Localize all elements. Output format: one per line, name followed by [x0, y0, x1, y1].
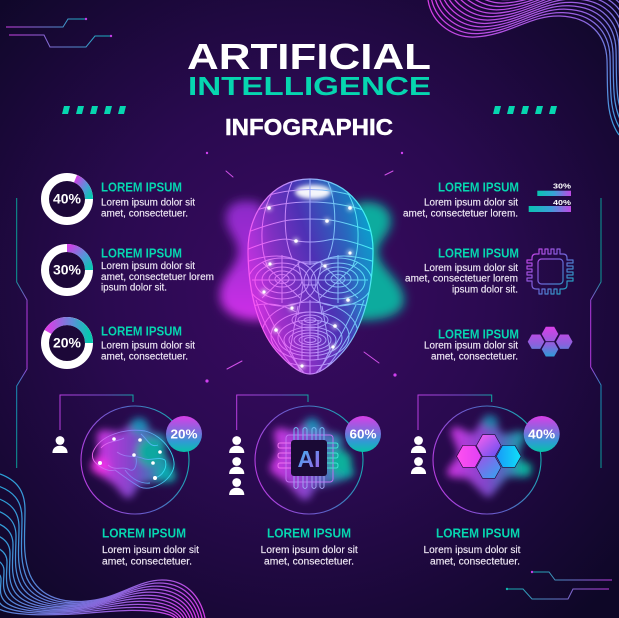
text block: right item 3 — [424, 327, 519, 362]
donut 30% — [45, 248, 89, 292]
text block: right item 2: LOREM IPSUM — [438, 247, 519, 261]
text block: item 3: Lorem ipsum dolor sit — [101, 341, 195, 352]
text block: item 1: Lorem ipsum dolor sit — [101, 198, 195, 209]
text block: bottom left: LOREM IPSUM — [102, 526, 186, 541]
teal dashes right — [493, 106, 557, 114]
badge 60%: 60% — [350, 426, 377, 442]
donut 40% — [45, 177, 89, 221]
badge 40%: 40% — [528, 426, 556, 442]
chip pins — [278, 428, 338, 488]
bracket and person — [52, 395, 133, 453]
text block: right item 1: LOREM IPSUM — [438, 181, 519, 195]
title: INTELLIGENCE — [188, 73, 431, 101]
wave lines bottom left — [0, 474, 205, 618]
title: INFOGRAPHIC — [225, 114, 393, 140]
face glow blobs — [220, 201, 404, 320]
text block: right item 2: Lorem ipsum dolor sit — [424, 263, 518, 274]
text block: bottom left: amet, consectetuer. — [102, 556, 192, 567]
AI label: AI — [298, 446, 320, 472]
title — [187, 36, 431, 140]
wave lines top right — [428, 0, 619, 135]
bracket and persons — [229, 395, 308, 495]
donut 20% — [45, 321, 89, 365]
text block: bottom right: Lorem ipsum dolor sit — [424, 545, 521, 556]
text block: bottom left: Lorem ipsum dolor sit — [102, 545, 199, 556]
text block: item 2: amet, consectetuer lorem — [101, 272, 214, 283]
text block: bottom center — [261, 526, 358, 567]
side line right — [591, 198, 601, 468]
teal dashes left — [62, 106, 126, 114]
title: ARTIFICIAL — [187, 36, 431, 77]
icon: hexagons — [528, 327, 573, 356]
text block: right item 2: ipsum dolor sit. — [452, 285, 518, 296]
blobs — [452, 415, 532, 492]
donut 20%: 20% — [53, 336, 81, 350]
text block: item 1: amet, consectetuer. — [101, 208, 188, 219]
brain outline — [92, 430, 174, 488]
text block: right item 3: LOREM IPSUM — [438, 327, 519, 341]
text block: right item 1: Lorem ipsum dolor sit — [424, 198, 518, 209]
circuit lines top left — [6, 18, 112, 47]
text block: item 3: amet, consectetuer. — [101, 351, 188, 362]
progress bars — [529, 182, 571, 212]
text block: bottom center: amet, consectetuer. — [264, 556, 354, 567]
text block: item 3 — [101, 325, 195, 362]
text block: right item 2: amet, consectetuer lorem — [405, 274, 518, 285]
side line left — [17, 198, 27, 468]
donut 40%: 40% — [53, 192, 81, 206]
glowing hexagons — [457, 435, 521, 478]
icon: chip — [527, 249, 573, 294]
badge 60% — [345, 416, 381, 452]
bracket and persons — [411, 395, 492, 474]
chip body — [291, 440, 327, 476]
text block: bottom right — [424, 526, 521, 567]
progress bars: 30% — [553, 182, 571, 190]
text block: right item 2 — [405, 247, 519, 296]
face wireframe — [246, 179, 375, 374]
badge 40% — [524, 416, 560, 452]
panel: brain circle — [52, 395, 202, 514]
badge 20% — [166, 416, 202, 452]
text block: item 2: ipsum dolor sit. — [101, 283, 167, 294]
progress bars: 40% — [553, 198, 571, 207]
text block: right item 1: amet, consectetuer lorem. — [403, 208, 518, 219]
text block: item 2: Lorem ipsum dolor sit — [101, 261, 195, 272]
panel: AI chip circle — [229, 395, 381, 514]
blobs — [91, 418, 172, 492]
text block: right item 1 — [403, 181, 519, 219]
text block: bottom right: amet, consectetuer. — [430, 556, 520, 567]
text block: item 3: LOREM IPSUM — [101, 325, 182, 339]
text block: right item 3: Lorem ipsum dolor sit — [424, 341, 518, 352]
circuit lines bottom right — [506, 571, 612, 599]
sparkles around face — [205, 152, 403, 383]
donut 30%: 30% — [53, 262, 81, 278]
text block: item 2: LOREM IPSUM — [101, 247, 182, 261]
badge 20%: 20% — [170, 426, 198, 442]
text block: item 2 — [101, 247, 214, 294]
text block: bottom center: Lorem ipsum dolor sit — [261, 545, 358, 556]
text block: item 1: LOREM IPSUM — [101, 181, 182, 195]
panel: hexagon circle — [411, 395, 560, 514]
text block: right item 3: amet, consectetuer. — [431, 351, 518, 362]
blobs — [276, 418, 352, 494]
text block: bottom center: LOREM IPSUM — [267, 526, 351, 541]
text block: bottom right: LOREM IPSUM — [436, 526, 520, 541]
text block: bottom left — [102, 526, 199, 567]
text block: item 1 — [101, 181, 195, 219]
